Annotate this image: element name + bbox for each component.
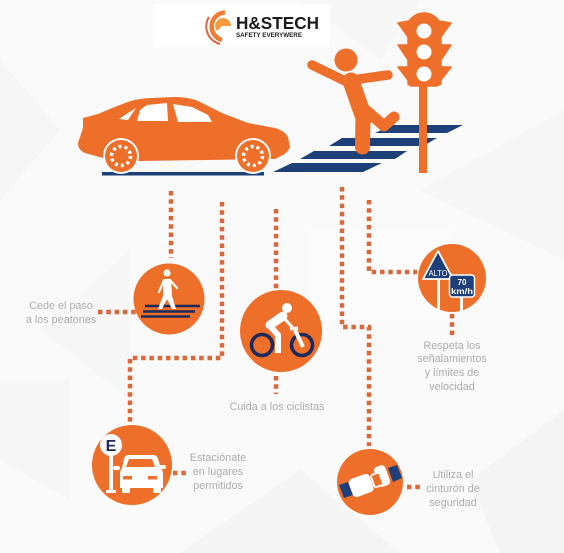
label: utiliza el cinturón: Utiliza el: [433, 469, 473, 481]
label: respeta los señalamientos: Respeta los: [423, 340, 481, 352]
crosswalk: [273, 125, 463, 172]
icon circle: road signs: [418, 244, 486, 312]
label: estaciónate: permitidos: [193, 480, 243, 492]
icon circle: pedestrian crossing: [134, 264, 204, 334]
dotted connectors: [98, 187, 452, 487]
icon circle: parking: E: [106, 438, 117, 455]
label: estaciónate: en lugares: [193, 466, 244, 478]
label: respeta los señalamientos: velocidad: [429, 381, 475, 393]
label: respeta los señalamientos: y límites de: [425, 367, 479, 379]
icon circle: seat belt: [337, 449, 403, 515]
logo: H&STECH: SAFETY EVERYWERE: [236, 33, 302, 39]
icon: falling pedestrian: [312, 48, 394, 147]
label: estaciónate: [190, 452, 246, 492]
label: respeta los señalamientos: señalamientos: [417, 353, 487, 365]
logo: H&STECH: H&STECH: [236, 13, 319, 33]
icon circle: cyclist: [240, 290, 322, 372]
logo: H&STECH: [206, 12, 319, 44]
label: utiliza el cinturón: seguridad: [429, 497, 477, 509]
label: cede el paso: [26, 300, 97, 326]
ground line under car: [102, 172, 264, 176]
icon circle: road signs: 70: [458, 278, 467, 287]
label: cede el paso: Cede el paso: [29, 300, 93, 312]
icon: car: [78, 97, 290, 174]
icon circle: road signs: ALTO: [428, 268, 448, 278]
label: respeta los señalamientos: [417, 340, 487, 393]
icon circle: road signs: km/h: [451, 287, 473, 296]
label: utiliza el cinturón: [426, 469, 480, 509]
label: estaciónate: Estaciónate: [190, 452, 246, 464]
label: cede el paso: a los peatones: [26, 314, 97, 326]
icon: traffic light: [398, 13, 451, 173]
label: cuida a los ciclistas: Cuida a los ciclistas: [230, 401, 325, 413]
label: utiliza el cinturón: cinturón de: [426, 483, 480, 495]
icon circle: parking: [92, 425, 172, 505]
